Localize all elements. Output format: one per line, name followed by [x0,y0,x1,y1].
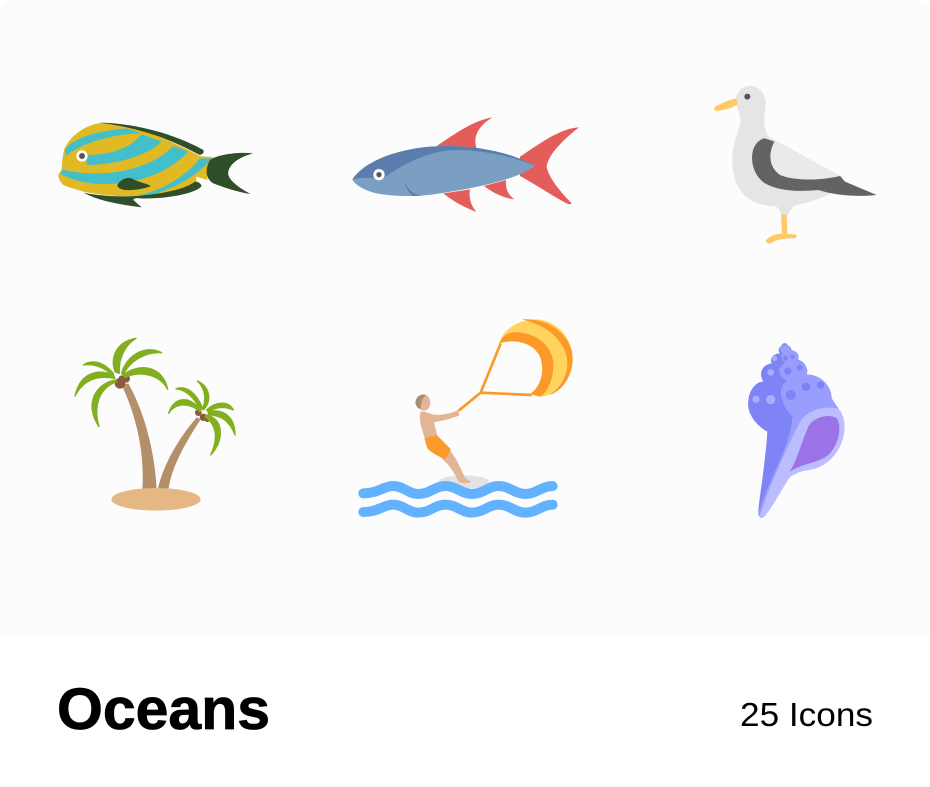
icon: conch shell [748,343,845,518]
surfboard [439,475,489,489]
icon: kitesurfer [363,319,573,513]
kite lines [459,343,532,411]
icon: tropical fish [58,123,253,207]
icon: palm trees on island [75,338,235,511]
icon count: 25 Icons [740,696,873,733]
surfer [416,395,471,483]
kite canopy [499,319,573,397]
waves [363,486,553,513]
icon: seagull [714,86,877,243]
icon: blue and red fish [352,117,579,212]
title: Oceans [57,677,270,742]
